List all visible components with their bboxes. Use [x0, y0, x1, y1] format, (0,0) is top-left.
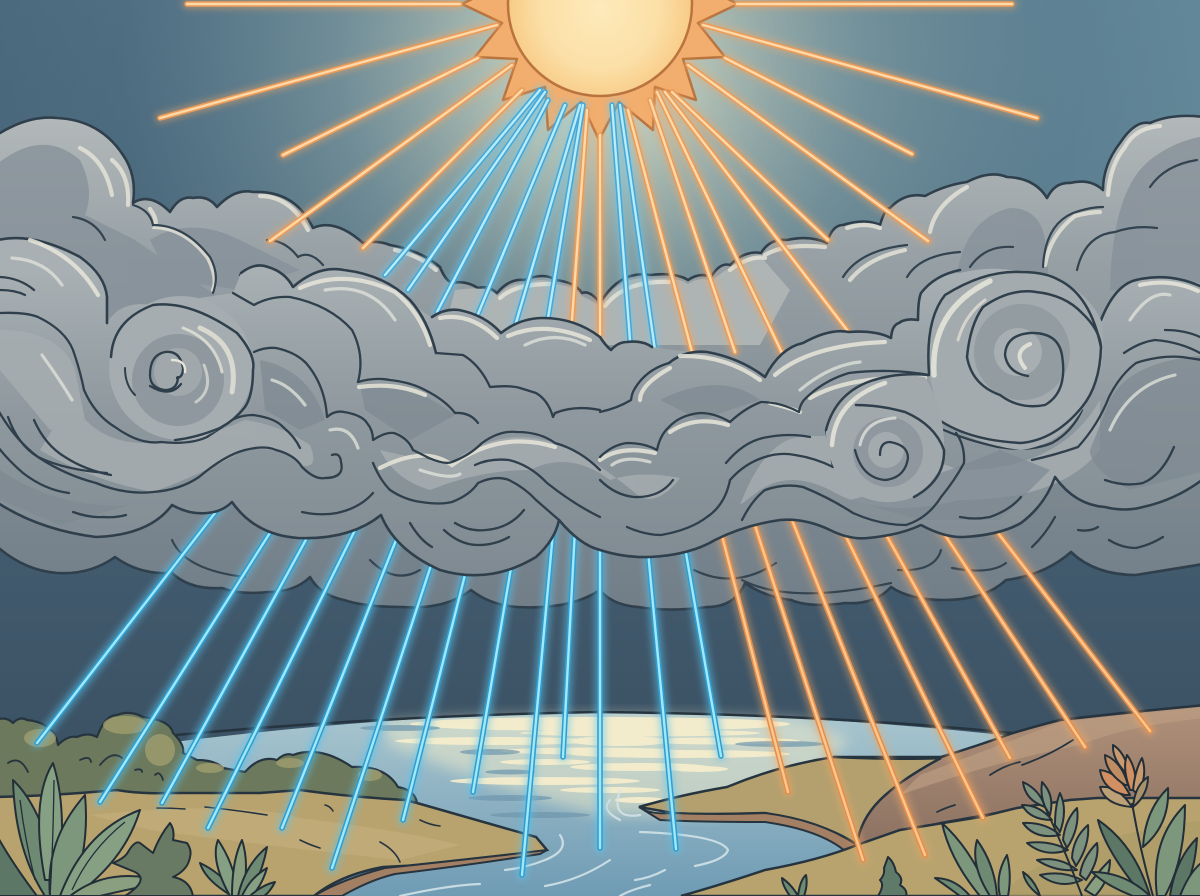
cream rim highlights on back cloud: [80, 126, 1160, 306]
far left bushes: [0, 713, 417, 803]
landscape: [0, 705, 1200, 896]
interior cloud contours: [0, 277, 1200, 548]
sun: [462, 0, 738, 140]
upper rays: orange and blue: [160, 4, 1037, 355]
water: [150, 712, 1030, 896]
right foreground land: [681, 798, 1200, 896]
lower rays: blue and orange: [37, 500, 1150, 875]
main cloud layer: [0, 238, 1200, 575]
main cloud outline top and bottom: [0, 238, 1200, 575]
plants: right cluster: [782, 745, 1200, 896]
left bank: [0, 790, 547, 896]
swirl: right large cloud: [928, 272, 1103, 450]
small cloud highlights: [12, 258, 1175, 476]
back cloud shading: [0, 135, 1200, 335]
pale centre puffs: [440, 257, 790, 345]
cream rims on main cloud: [30, 240, 1198, 468]
back cloud layer with lower fringe: [0, 116, 1200, 610]
sun disc: [508, 0, 692, 96]
swirl: left cloud: [109, 296, 253, 440]
flower: [1100, 745, 1153, 896]
plants: left cluster: [0, 763, 275, 896]
far right hill: [800, 705, 1200, 845]
right near bank: [639, 757, 941, 851]
main cloud body: [0, 238, 1200, 575]
sun spikes: [462, 0, 738, 140]
swirl: right small cloud: [826, 374, 944, 502]
fern: [1022, 782, 1110, 896]
back cloud detail strokes: [73, 160, 1197, 593]
shading bands: [0, 330, 1200, 525]
